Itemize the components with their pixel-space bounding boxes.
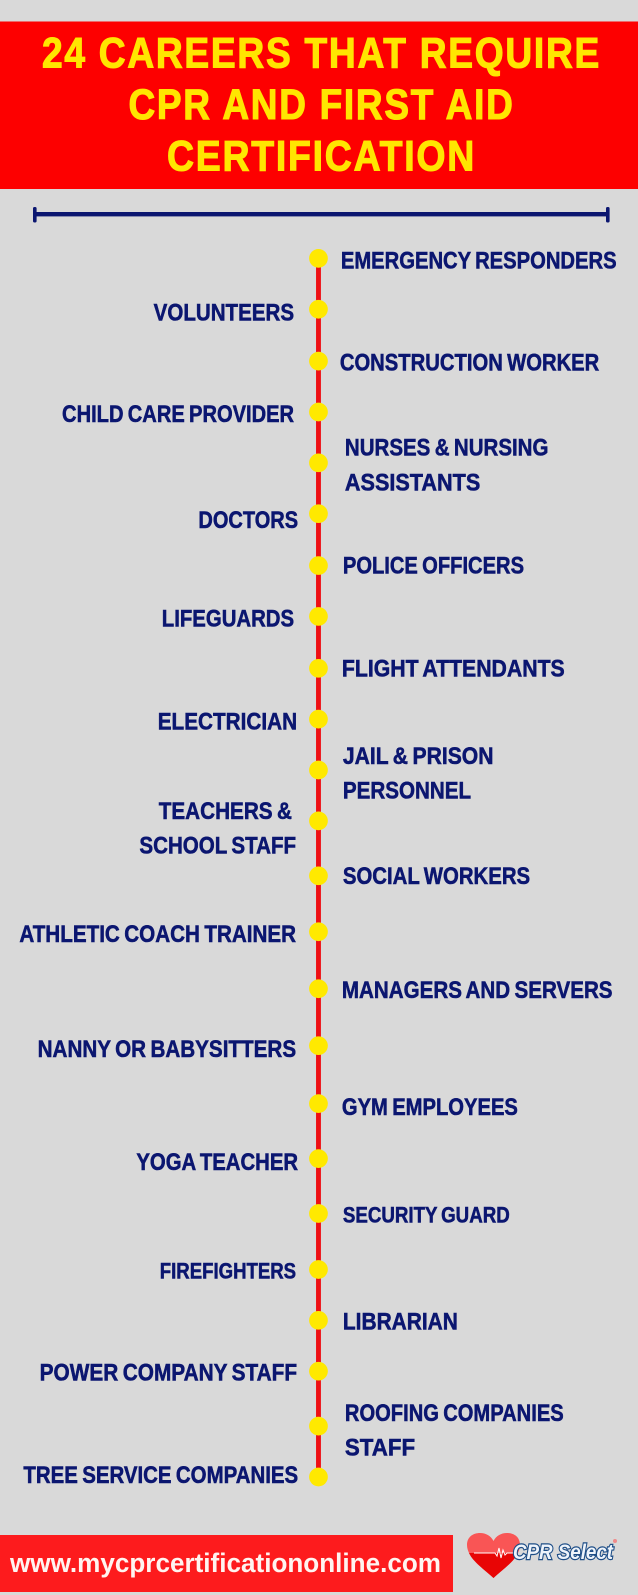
career: doctors: DOCTORS (198, 507, 298, 534)
career: flight attendants: FLIGHT ATTENDANTS (342, 655, 565, 682)
career: teachers and school staff: SCHOOL STAFF (139, 832, 296, 859)
divider bar (33, 207, 610, 222)
icon: heart (467, 1533, 520, 1578)
timeline of careers (19, 248, 617, 1489)
career: jail and prison personnel (343, 743, 493, 805)
career: security guard: SECURITY GUARD (343, 1203, 510, 1228)
career: power company staff: POWER COMPANY STAFF (40, 1359, 297, 1386)
career: yoga teacher: YOGA TEACHER (136, 1149, 298, 1176)
career: jail and prison personnel: JAIL & PRISON (343, 743, 493, 770)
career: roofing companies staff: STAFF (345, 1435, 415, 1462)
career: athletic coach trainer: ATHLETIC COACH TRAINER (19, 921, 296, 948)
timeline spine (316, 258, 321, 1477)
career: teachers and school staff: TEACHERS & (159, 798, 292, 825)
career: teachers and school staff (139, 798, 296, 859)
career: nanny or babysitters: NANNY OR BABYSITTERS (38, 1036, 296, 1063)
career: electrician: ELECTRICIAN (158, 708, 297, 735)
website banner (0, 1535, 453, 1592)
title banner: CPR AND FIRST AID (128, 81, 514, 129)
career: jail and prison personnel: PERSONNEL (343, 778, 471, 805)
career: tree service companies: TREE SERVICE COMPANIES (23, 1462, 298, 1489)
career: lifeguards: LIFEGUARDS (162, 606, 294, 633)
career: gym employees: GYM EMPLOYEES (342, 1094, 518, 1121)
career: librarian: LIBRARIAN (343, 1308, 458, 1335)
registered mark (613, 1539, 617, 1543)
career: firefighters: FIREFIGHTERS (160, 1259, 296, 1284)
career: nurses and nursing assistants: NURSES & NURSING (345, 435, 548, 462)
career: nurses and nursing assistants: ASSISTANTS (345, 469, 480, 496)
career: volunteers: VOLUNTEERS (154, 299, 294, 326)
website banner: www.mycprcertificationonline.com (9, 1548, 441, 1578)
logo wordmark: CPR Select (513, 1541, 614, 1564)
career: child care provider: CHILD CARE PROVIDER (62, 401, 294, 428)
career: roofing companies staff (345, 1400, 564, 1462)
career: nurses and nursing assistants (345, 435, 548, 496)
career: roofing companies staff: ROOFING COMPANIES (345, 1400, 564, 1427)
title banner (0, 22, 638, 189)
title banner: CERTIFICATION (167, 133, 476, 181)
career: social workers: SOCIAL WORKERS (343, 863, 530, 890)
logo: CPR Select heart (467, 1533, 617, 1578)
career: police officers: POLICE OFFICERS (343, 553, 524, 580)
timeline dots (309, 249, 328, 1486)
